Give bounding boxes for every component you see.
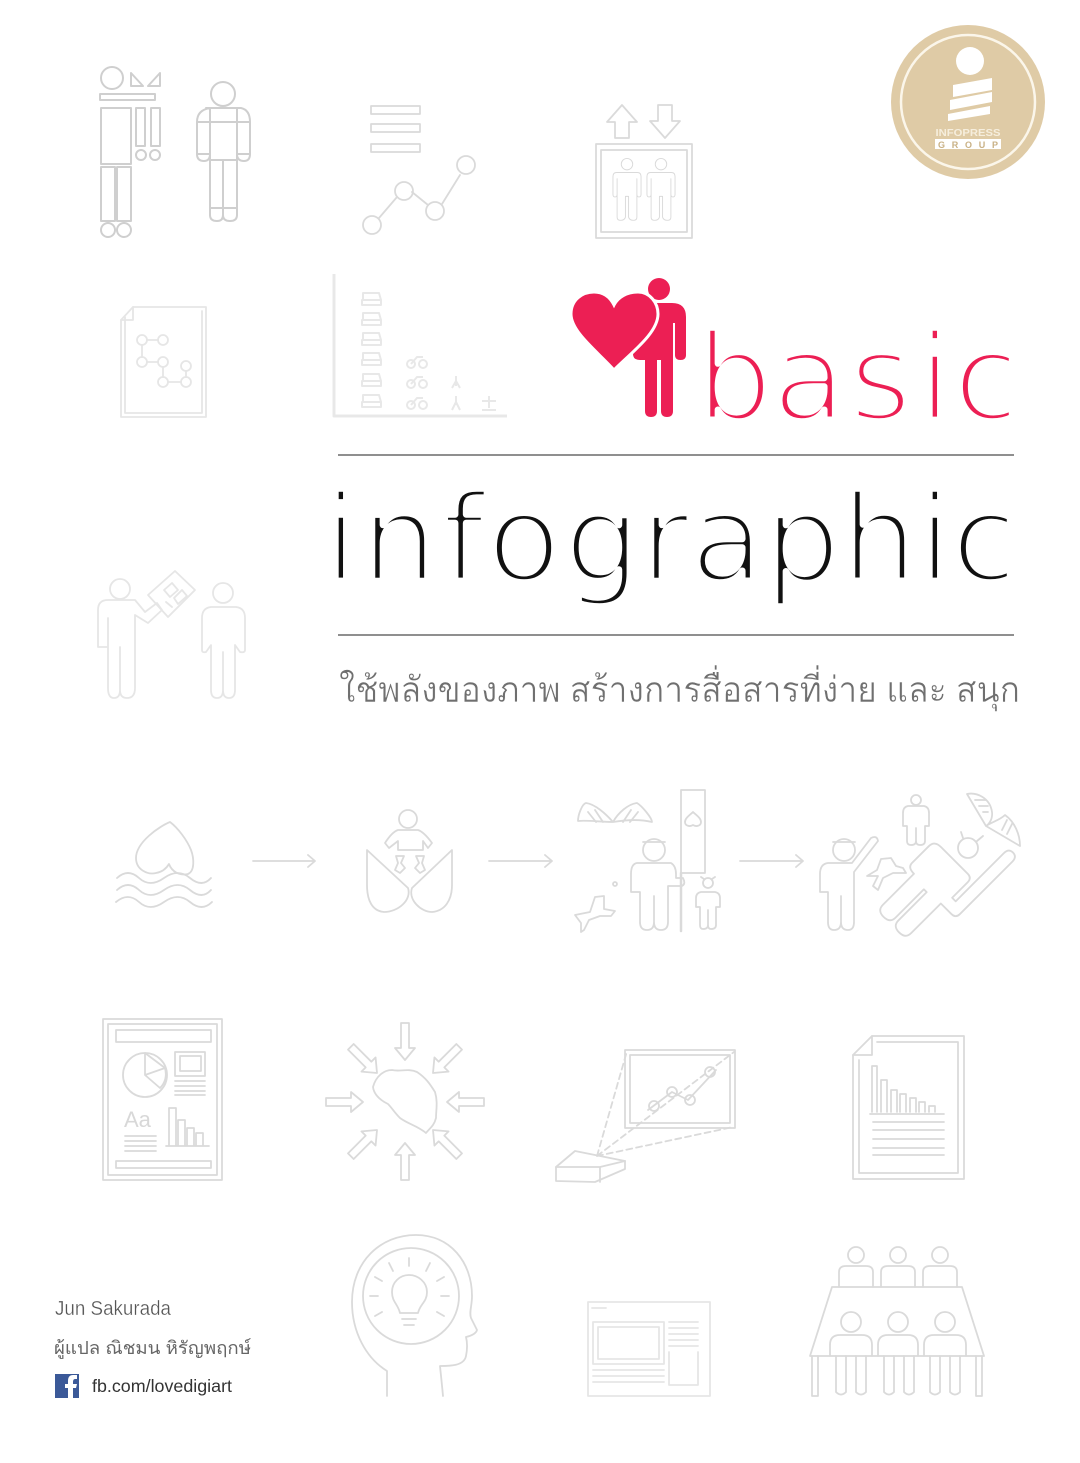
title: basic: basic <box>696 308 1020 449</box>
icon: report document <box>853 1036 964 1179</box>
icon: poster with charts <box>103 1019 222 1180</box>
icon: two people with document <box>98 571 245 698</box>
icon: brain with arrows <box>326 1023 484 1180</box>
icon: poster with charts: Aa <box>124 1107 152 1132</box>
text: credits: ผู้แปล ณิชมน หิรัญพฤกษ์ <box>54 1338 251 1359</box>
icon: projector and screen <box>556 1050 735 1182</box>
arrow 2 <box>489 855 552 867</box>
divider top <box>338 454 1014 456</box>
icon: baby on leaves <box>367 810 452 912</box>
icon: heart on waves <box>116 822 212 907</box>
icon: head with light bulb <box>352 1235 477 1396</box>
text: credits: fb.com/lovedigiart <box>92 1376 232 1396</box>
icon: wings, man with flag, child, dog <box>575 790 720 932</box>
icon: man waving, fallen devil, dog, angel wings <box>820 794 1020 954</box>
title: infographic: infographic <box>324 469 1018 610</box>
badge: Infopress Group gold seal <box>891 25 1045 179</box>
arrow 1 <box>253 855 315 867</box>
icon: body parts and assembled person <box>100 67 250 237</box>
icon: facebook <box>55 1374 79 1398</box>
divider bottom <box>338 634 1014 636</box>
icon: people at meeting table <box>810 1247 984 1396</box>
arrow 3 <box>740 855 803 867</box>
badge: Infopress Group gold seal: INFOPRESS <box>936 128 1001 139</box>
icon: elevator <box>596 105 692 238</box>
text: credits <box>54 1298 251 1398</box>
text: credits: Jun Sakurada <box>55 1298 172 1320</box>
icon: flow document <box>121 307 206 417</box>
icon: web page layout <box>588 1302 710 1396</box>
icon: heart and person logo <box>571 278 686 417</box>
chart: transport pictogram bars <box>334 274 507 416</box>
badge: Infopress Group gold seal: GROUP <box>938 140 998 150</box>
subtitle: ใช้พลังของภาพ สร้างการสื่อสารที่ง่าย และ สนุก <box>339 665 1020 712</box>
icon: lines and line chart <box>363 106 475 234</box>
